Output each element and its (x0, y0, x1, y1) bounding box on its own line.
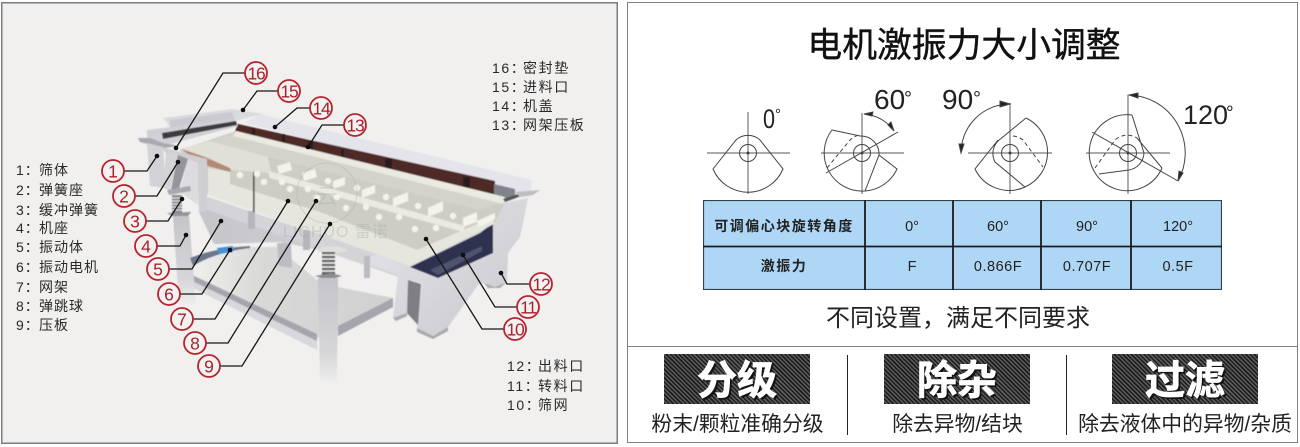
legend: parts 12 to 10 (507, 358, 585, 413)
row: excitation force: 0.866F (974, 259, 1022, 275)
back wall (245, 114, 532, 197)
caption: different settings: 不同设置，满足不同要求 (826, 305, 1090, 332)
legend: parts 1 to 9: 1： (16, 162, 40, 178)
legend: parts 16 to 13: 16： (492, 60, 526, 76)
feature: impurity removal (884, 354, 1030, 436)
watermark: 云 (316, 184, 338, 209)
callout numbers: 6 (164, 284, 174, 304)
legend: parts 1 to 9: 缓冲弹簧 (39, 202, 99, 218)
badge: grading: 分级 (697, 359, 777, 403)
legend: parts 16 to 13 (492, 60, 585, 133)
legend: parts 12 to 10: 10： (507, 397, 541, 413)
legend: parts 1 to 9: 网架 (39, 279, 69, 295)
floor frame (183, 247, 393, 350)
callout numbers: 15 (280, 82, 298, 102)
legend: parts 1 to 9: 振动电机 (39, 259, 99, 275)
badge: grading (664, 354, 810, 404)
legend: parts 1 to 9: 压板 (39, 317, 69, 333)
legend: parts 16 to 13: 14： (492, 98, 526, 114)
vibration motor (217, 246, 233, 254)
feature: grading (651, 354, 824, 436)
callout numbers: 2 (119, 186, 129, 206)
numbered callouts (102, 62, 552, 377)
legend: parts 1 to 9: 5： (16, 239, 40, 255)
row: excitation force: 0.5F (1162, 259, 1194, 275)
panel background (2, 3, 617, 443)
caption: filtration: 除去液体中的异物/杂质 (1078, 413, 1292, 436)
legend: parts 16 to 13: 15： (492, 79, 526, 95)
legend: parts 16 to 13: 进料口 (523, 79, 570, 95)
table: angle vs force (703, 200, 1222, 290)
feed hopper (138, 109, 263, 188)
deck rails (233, 131, 505, 232)
title: 电机激振力大小调整 (807, 26, 1121, 65)
under body (199, 198, 408, 278)
buffer spring (167, 195, 191, 216)
legend: parts 1 to 9: 弹跳球 (39, 298, 84, 314)
row: rotation angle: 可调偏心块旋转角度 (714, 218, 854, 234)
legend: parts 12 to 10: 11： (507, 378, 540, 394)
panel: excitation force adjustment (627, 2, 1298, 443)
label: 0 degrees: ° (775, 106, 781, 123)
bouncing balls and bars (237, 162, 495, 232)
legend: parts 1 to 9 (16, 162, 99, 333)
legend: parts 16 to 13: 13： (492, 117, 526, 133)
machine cover strip (233, 124, 495, 198)
label: 0 degrees: 0 (763, 105, 775, 135)
caption: impurity removal: 除去异物/结块 (892, 413, 1023, 436)
legend: parts 12 to 10: 转料口 (538, 378, 585, 394)
loading slab (180, 141, 271, 173)
legend: parts 1 to 9: 9： (16, 317, 40, 333)
row: rotation angle: 60° (987, 219, 1009, 235)
legend: parts 12 to 10: 出料口 (538, 358, 585, 374)
rear centre leg (277, 243, 292, 268)
legend: parts 1 to 9: 2： (16, 182, 40, 198)
diagram: 120 degrees (1086, 93, 1185, 194)
callout numbers: 14 (312, 98, 331, 118)
callout numbers: 1 (108, 162, 118, 182)
callout numbers: 8 (190, 334, 200, 354)
row: rotation angle: 0° (905, 219, 919, 235)
left support post (162, 147, 207, 212)
end bracket (503, 193, 521, 202)
legend: parts 16 to 13: 网架压板 (523, 117, 585, 133)
screen deck (180, 131, 505, 262)
legend: parts 1 to 9: 振动体 (39, 239, 84, 255)
callout numbers: 5 (153, 260, 163, 280)
label: 60 degrees: ° (904, 88, 912, 110)
legend: parts 1 to 9: 4： (16, 220, 40, 236)
label: 120 degrees: ° (1226, 103, 1234, 124)
badge: filtration: 过滤 (1145, 359, 1225, 403)
diagrams: eccentric block angles (707, 84, 1234, 194)
row: excitation force: 0.707F (1063, 259, 1111, 275)
callout numbers: 10 (506, 320, 525, 340)
callout numbers (108, 64, 550, 376)
legend: parts 12 to 10: 12： (507, 358, 541, 374)
frame side band (205, 196, 412, 279)
row: rotation angle (714, 218, 1193, 235)
label: 60 degrees: 60 (874, 84, 905, 115)
legend: parts 1 to 9: 6： (16, 259, 40, 275)
callout numbers: 9 (204, 356, 214, 376)
label: 120 degrees: 120 (1183, 100, 1228, 130)
legend: parts 1 to 9: 7： (16, 279, 40, 295)
under strut (190, 246, 250, 266)
callout numbers: 7 (177, 310, 187, 330)
label: 90 degrees: ° (973, 88, 981, 110)
callout numbers: 12 (532, 274, 550, 294)
row: excitation force: 激振力 (761, 258, 807, 274)
row: excitation force (761, 258, 1194, 275)
front spring (315, 246, 347, 280)
legend: parts 12 to 10: 筛网 (538, 397, 569, 413)
row: rotation angle: 90° (1076, 219, 1098, 235)
legend: parts 1 to 9: 3： (16, 202, 40, 218)
callout numbers: 16 (247, 64, 265, 84)
diagram: 90 degrees (959, 101, 1052, 194)
panel: machine structure (1, 2, 618, 444)
watermark (283, 163, 389, 241)
front slab wall (208, 168, 494, 266)
callout numbers: 13 (346, 116, 364, 136)
row: rotation angle: 120° (1163, 219, 1193, 235)
leader dots (155, 108, 503, 275)
badge: impurity removal (884, 354, 1030, 404)
legend: parts 1 to 9: 筛体 (39, 162, 69, 178)
legend: parts 16 to 13: 密封垫 (523, 60, 570, 76)
callout numbers: 3 (130, 212, 140, 232)
caption: grading: 粉末/颗粒准确分级 (651, 413, 824, 436)
feature: filtration (1078, 354, 1292, 436)
badge: filtration (1112, 354, 1258, 404)
callout numbers: 11 (520, 298, 536, 318)
front leg (318, 278, 338, 384)
leader lines (124, 73, 530, 366)
callout numbers: 4 (141, 236, 151, 256)
discharge interior (410, 223, 493, 278)
legend: parts 1 to 9: 弹簧座 (39, 182, 84, 198)
divider (627, 346, 1298, 347)
watermark: LICHUO 雷诺 (283, 223, 389, 241)
diagram: 60 degrees (821, 112, 904, 194)
diagram: 0 degrees (707, 112, 790, 194)
label: 90 degrees: 90 (942, 84, 973, 115)
row: excitation force: F (908, 259, 917, 275)
badge: impurity removal: 除杂 (917, 359, 997, 403)
legend: parts 16 to 13: 机盖 (523, 98, 554, 114)
label: 0 degrees (763, 105, 781, 135)
legend: parts 1 to 9: 8： (16, 298, 40, 314)
outlet end housing (370, 198, 528, 336)
illustration: vibrating screen machine (138, 109, 540, 384)
left leg (173, 216, 196, 305)
legend: parts 1 to 9: 机座 (39, 220, 69, 236)
